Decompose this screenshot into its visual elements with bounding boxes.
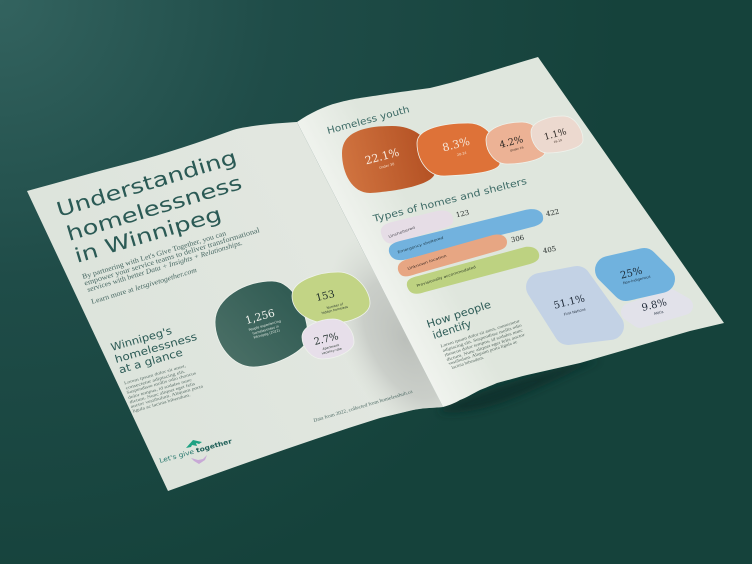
body text right: lacinia bibendum. (451, 355, 485, 370)
body text right (440, 318, 526, 370)
blob: first nations (540, 280, 610, 331)
blob: metis (630, 297, 684, 319)
blob: hidden homeless (292, 272, 370, 323)
blob: people experiencing homelessness: Winnipeg (2022) (253, 328, 280, 340)
blob: vacancy rate: vacancy rate (321, 347, 342, 355)
bar: emergency sheltered: 422 (545, 208, 560, 218)
heading: How people identify: identify (431, 318, 473, 342)
body text left: auctor vestibulum. Aliquam porta (130, 383, 203, 409)
blob: hidden homeless: 153 (315, 289, 336, 304)
blob: non-indigenous: 25% (619, 266, 644, 282)
title: in Winnipeg (72, 202, 224, 268)
blob: non-indigenous (609, 262, 661, 287)
blob: metis: Métis (654, 310, 664, 316)
blob: hidden homeless: Number of (326, 302, 344, 310)
blob: 8.3% (417, 123, 500, 176)
body text left: dolor tempus, id sodales nunc (127, 377, 193, 401)
blob: metis: 9.8% (641, 297, 668, 314)
blob: 4.2%: Under 16 (510, 145, 524, 153)
heading: Winnipeg's homelessness at a glance: homelessness (114, 331, 199, 366)
blob: people experiencing homelessness: homelessness in (252, 324, 279, 336)
blob: hidden homeless: hidden homeless (321, 305, 349, 315)
heading: Types of homes and shelters: Types of homes and shelters (371, 176, 528, 225)
body text left (123, 363, 203, 413)
heading: Homeless youth: Homeless youth (326, 104, 411, 137)
source note: Data from 2022, collected from homelesshub.ca (313, 390, 414, 424)
heading: Winnipeg's homelessness at a glance (110, 325, 199, 376)
bar: provisionally accommodated: 405 (542, 245, 557, 255)
bubble chart: homeless youth (342, 116, 583, 193)
blob: people experiencing homelessness: People experiencing (248, 319, 281, 332)
blob: vacancy rate: 2.7% (313, 331, 340, 348)
bar: unknown location (398, 234, 525, 276)
bar: emergency sheltered (389, 208, 560, 260)
paper shadow (440, 360, 600, 413)
bar: provisionally accommodated: Provisionally accommodated (416, 265, 476, 288)
title: Understanding (54, 145, 239, 222)
body text right: rhoncus dolor tempus, id sodales nunc (444, 327, 524, 358)
intro text: empower your service teams to deliver transformational (83, 226, 261, 287)
heading: Winnipeg's homelessness at a glance: Winnipeg's (110, 325, 173, 354)
blob: 1.1%: 1.1% (543, 127, 568, 143)
blob: vacancy rate: Apartment (322, 343, 340, 351)
body text right: Lorem ipsum dolor sit amet, consectetur (440, 318, 521, 349)
blob: people experiencing homelessness (215, 281, 308, 367)
body text left: Suspendisse mollis odio rhoncus (126, 370, 197, 395)
intro text: Learn more at letsgivetogether.com (90, 266, 198, 306)
intro text: By partnering with Let's Give Together, you can (81, 229, 227, 281)
bar: unknown location: 306 (510, 234, 525, 244)
bar: unsheltered: 123 (455, 209, 470, 219)
icon: hands (191, 455, 207, 464)
heading: How people identify (425, 299, 493, 342)
bubble chart: how people identify (540, 262, 684, 331)
bar: unknown location: Unknown location (407, 254, 447, 271)
panel: left page (27, 122, 443, 491)
blob: first nations: First Nations (563, 307, 586, 317)
intro text (81, 226, 261, 306)
panel: right page (297, 57, 724, 407)
logo: Let's give together (158, 437, 234, 465)
blob: 1.1% (531, 116, 583, 153)
blob: 8.3%: 20-24 (456, 151, 467, 157)
bar: provisionally accommodated (407, 245, 557, 294)
bar: unsheltered (381, 209, 470, 244)
heading: Winnipeg's homelessness at a glance: at a glance (118, 347, 184, 376)
blob: 22.1%: Under 30 (379, 162, 395, 170)
body text left: ligula ac lacinia bibendum. (132, 392, 191, 413)
body text left: consectetur adipiscing elit. (125, 369, 186, 390)
body text left: dictum. Nunc aliquet eget felis (129, 381, 196, 404)
body text left: Lorem ipsum dolor sit amet, (123, 363, 187, 386)
blob: people experiencing homelessness: 1,256 (244, 307, 277, 327)
blob: vacancy rate (302, 319, 354, 359)
body text right: adipiscing elit. Suspendisse mollis odio (442, 323, 522, 353)
title: homelessness (64, 170, 245, 246)
bubble chart: Winnipeg at a glance (215, 272, 370, 367)
blob: 4.2%: 4.2% (498, 134, 524, 151)
blob: 22.1% (342, 126, 435, 193)
blob: 22.1%: 22.1% (364, 146, 401, 167)
logo wordmark: Let's give together (158, 437, 234, 465)
icon: house roof (186, 440, 202, 448)
blob: 4.2% (486, 122, 545, 164)
blob: first nations: 51.1% (553, 293, 586, 312)
bar: emergency sheltered: Emergency sheltered (397, 236, 444, 254)
bar: unsheltered: Unsheltered (388, 226, 416, 239)
bar chart: types of homes and shelters (381, 208, 560, 294)
left page spine shading (27, 122, 443, 491)
blob: 8.3%: 8.3% (441, 135, 471, 155)
blob: non-indigenous: Non-Indigenous (623, 275, 651, 285)
body text right: dictum. Nunc aliquet eget felis auctor (446, 332, 526, 362)
intro text: services with better Data + Insights + Relationships. (86, 239, 244, 294)
blob: 1.1%: 16-19 (553, 138, 562, 144)
body text right: vestibulum. Aliquam porta ligula ac (448, 339, 518, 366)
heading: How people identify: How people (425, 299, 493, 331)
title (54, 145, 245, 268)
